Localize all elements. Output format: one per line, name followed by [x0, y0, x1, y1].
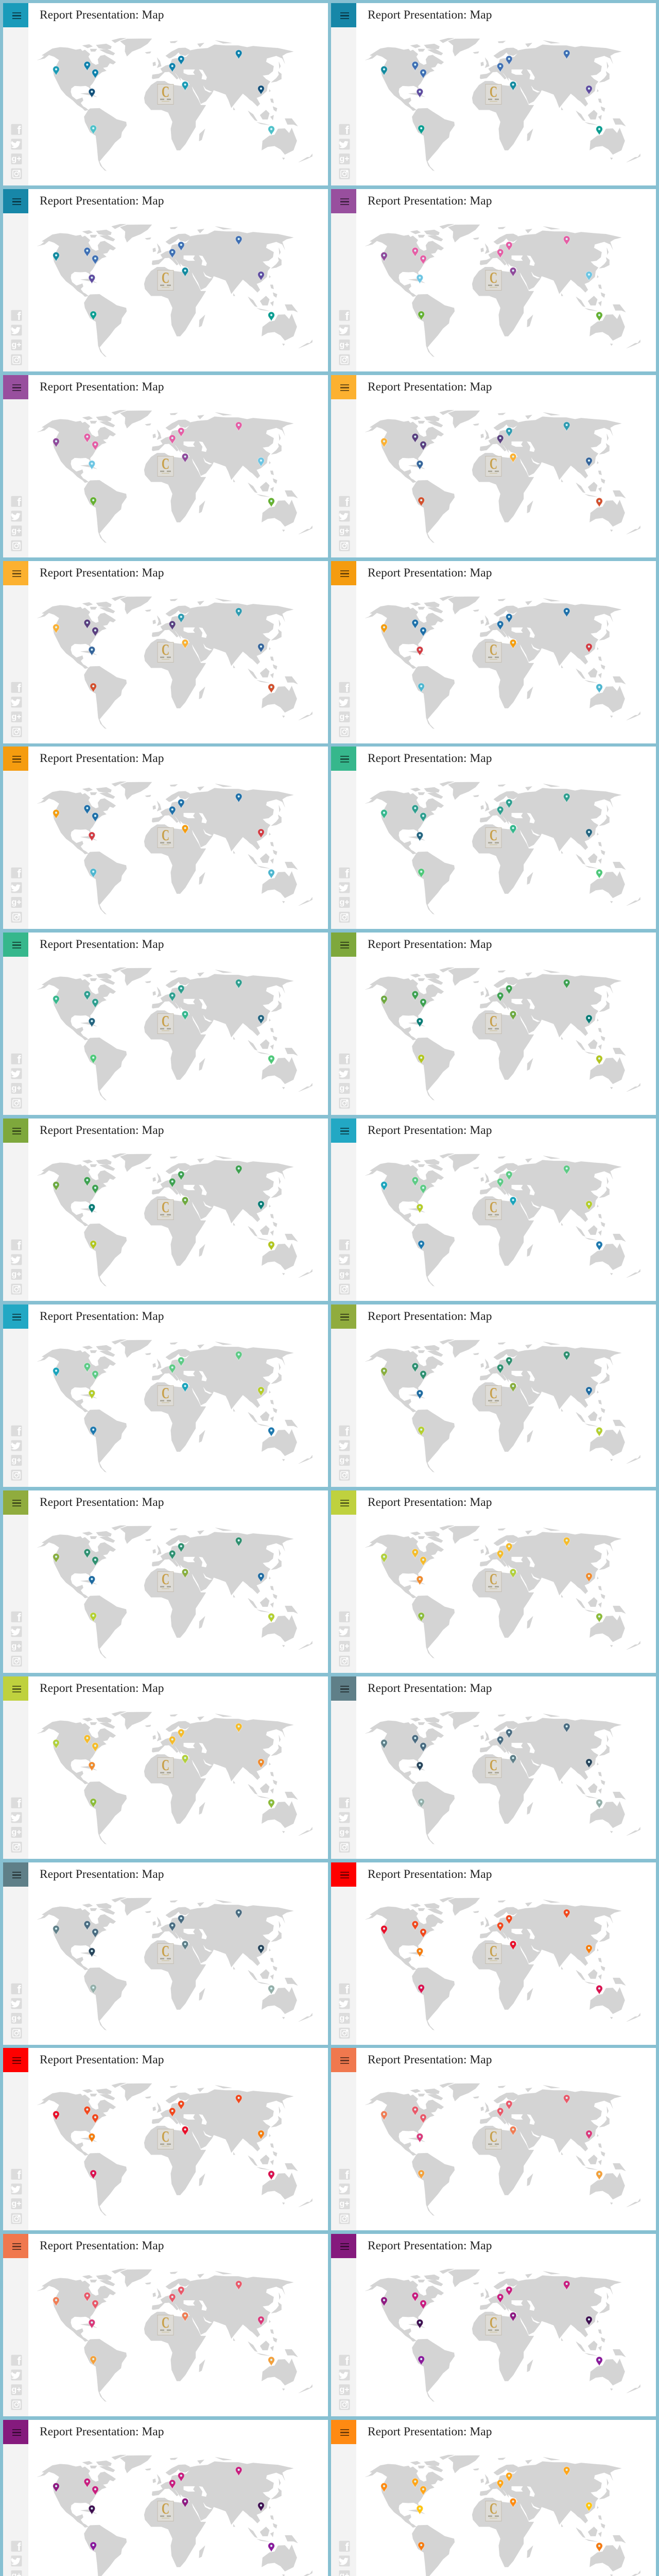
title: Report Presentation: Map — [40, 194, 164, 208]
slide 10: map — [331, 747, 656, 929]
slide 16: map — [331, 1304, 656, 1487]
map graphic — [11, 224, 313, 365]
sidebar — [3, 771, 28, 929]
title: Report Presentation: Map — [40, 2425, 164, 2438]
title: Report Presentation: Map — [368, 1310, 492, 1323]
map graphic — [339, 224, 640, 365]
menu tab — [3, 747, 28, 771]
slide 12: map — [331, 933, 656, 1115]
sidebar — [331, 1887, 356, 2045]
slide 6: map — [331, 375, 656, 557]
map graphic — [339, 1897, 640, 2039]
slide 9: map — [3, 747, 328, 929]
menu tab — [3, 1676, 28, 1701]
menu tab — [331, 1304, 356, 1329]
map graphic — [11, 1525, 313, 1667]
slide 21: map — [3, 1862, 328, 2045]
menu tab — [3, 1862, 28, 1887]
sidebar — [331, 213, 356, 371]
sidebar — [331, 771, 356, 929]
slide 13: map — [3, 1118, 328, 1301]
slide 17: map — [3, 1490, 328, 1673]
menu tab — [331, 747, 356, 771]
menu tab — [3, 561, 28, 585]
slide 15: map — [3, 1304, 328, 1487]
slide 1: map — [3, 3, 328, 185]
title: Report Presentation: Map — [368, 938, 492, 951]
menu tab — [331, 375, 356, 399]
title: Report Presentation: Map — [368, 566, 492, 580]
menu tab — [3, 2420, 28, 2444]
slide 26: map — [331, 2234, 656, 2416]
menu tab — [3, 933, 28, 957]
map graphic — [11, 596, 313, 737]
slide 11: map — [3, 933, 328, 1115]
slide 27: map — [3, 2420, 328, 2576]
sidebar — [3, 1515, 28, 1673]
sidebar — [331, 27, 356, 185]
title: Report Presentation: Map — [368, 2425, 492, 2438]
sidebar — [331, 399, 356, 557]
sidebar — [3, 585, 28, 743]
title: Report Presentation: Map — [368, 1682, 492, 1695]
menu tab — [3, 2234, 28, 2258]
sidebar — [331, 1515, 356, 1673]
slide 4: map — [331, 189, 656, 371]
menu tab — [331, 1676, 356, 1701]
map graphic — [339, 1153, 640, 1295]
title: Report Presentation: Map — [368, 2239, 492, 2252]
map graphic — [11, 1897, 313, 2039]
title: Report Presentation: Map — [368, 752, 492, 765]
sidebar — [3, 957, 28, 1115]
map graphic — [339, 2269, 640, 2410]
map graphic — [339, 1525, 640, 1667]
title: Report Presentation: Map — [368, 194, 492, 208]
map graphic — [11, 2082, 313, 2224]
sidebar — [3, 2444, 28, 2576]
title: Report Presentation: Map — [368, 1868, 492, 1881]
slide 23: map — [3, 2048, 328, 2230]
sidebar — [331, 2258, 356, 2416]
title: Report Presentation: Map — [368, 1496, 492, 1509]
map graphic — [11, 1153, 313, 1295]
map graphic — [11, 1340, 313, 1481]
map graphic — [339, 38, 640, 179]
title: Report Presentation: Map — [40, 2053, 164, 2066]
title: Report Presentation: Map — [40, 938, 164, 951]
slide 5: map — [3, 375, 328, 557]
title: Report Presentation: Map — [40, 2239, 164, 2252]
title: Report Presentation: Map — [368, 8, 492, 22]
title: Report Presentation: Map — [40, 1682, 164, 1695]
menu tab — [3, 1118, 28, 1143]
map graphic — [11, 38, 313, 179]
slide 20: map — [331, 1676, 656, 1859]
sidebar — [3, 1143, 28, 1301]
menu tab — [331, 189, 356, 213]
sidebar — [3, 399, 28, 557]
menu tab — [3, 1304, 28, 1329]
sidebar — [331, 2072, 356, 2230]
menu tab — [331, 2234, 356, 2258]
map graphic — [339, 410, 640, 551]
sidebar — [3, 1701, 28, 1859]
slide 19: map — [3, 1676, 328, 1859]
map graphic — [11, 1711, 313, 1853]
menu tab — [3, 2048, 28, 2072]
map graphic — [11, 410, 313, 551]
menu tab — [3, 189, 28, 213]
slide 18: map — [331, 1490, 656, 1673]
sidebar — [331, 957, 356, 1115]
title: Report Presentation: Map — [368, 1124, 492, 1137]
title: Report Presentation: Map — [40, 1124, 164, 1137]
slide 3: map — [3, 189, 328, 371]
sidebar — [3, 213, 28, 371]
menu tab — [331, 1490, 356, 1515]
sidebar — [3, 2258, 28, 2416]
map graphic — [11, 2454, 313, 2576]
title: Report Presentation: Map — [368, 380, 492, 394]
menu tab — [3, 1490, 28, 1515]
sidebar — [3, 27, 28, 185]
menu tab — [331, 2420, 356, 2444]
map graphic — [339, 2454, 640, 2576]
slide 2: map — [331, 3, 656, 185]
title: Report Presentation: Map — [40, 1310, 164, 1323]
menu tab — [3, 375, 28, 399]
sidebar — [3, 2072, 28, 2230]
map graphic — [11, 2269, 313, 2410]
sidebar — [3, 1887, 28, 2045]
menu tab — [3, 3, 28, 27]
title: Report Presentation: Map — [40, 1496, 164, 1509]
slide 25: map — [3, 2234, 328, 2416]
slide 7: map — [3, 561, 328, 743]
map graphic — [339, 596, 640, 737]
map graphic — [339, 1711, 640, 1853]
menu tab — [331, 561, 356, 585]
title: Report Presentation: Map — [40, 752, 164, 765]
title: Report Presentation: Map — [40, 8, 164, 22]
sidebar — [331, 585, 356, 743]
slide 22: map — [331, 1862, 656, 2045]
title: Report Presentation: Map — [40, 566, 164, 580]
menu tab — [331, 2048, 356, 2072]
sidebar — [3, 1329, 28, 1487]
title: Report Presentation: Map — [40, 1868, 164, 1881]
title: Report Presentation: Map — [40, 380, 164, 394]
slide 28: map — [331, 2420, 656, 2576]
menu tab — [331, 1118, 356, 1143]
map graphic — [339, 781, 640, 923]
map graphic — [339, 968, 640, 1109]
menu tab — [331, 3, 356, 27]
map graphic — [339, 1340, 640, 1481]
map graphic — [11, 781, 313, 923]
menu tab — [331, 1862, 356, 1887]
slide 24: map — [331, 2048, 656, 2230]
slide 14: map — [331, 1118, 656, 1301]
sidebar — [331, 1329, 356, 1487]
map graphic — [11, 968, 313, 1109]
title: Report Presentation: Map — [368, 2053, 492, 2066]
slide 8: map — [331, 561, 656, 743]
sidebar — [331, 1701, 356, 1859]
menu tab — [331, 933, 356, 957]
sidebar — [331, 1143, 356, 1301]
map graphic — [339, 2082, 640, 2224]
sidebar — [331, 2444, 356, 2576]
